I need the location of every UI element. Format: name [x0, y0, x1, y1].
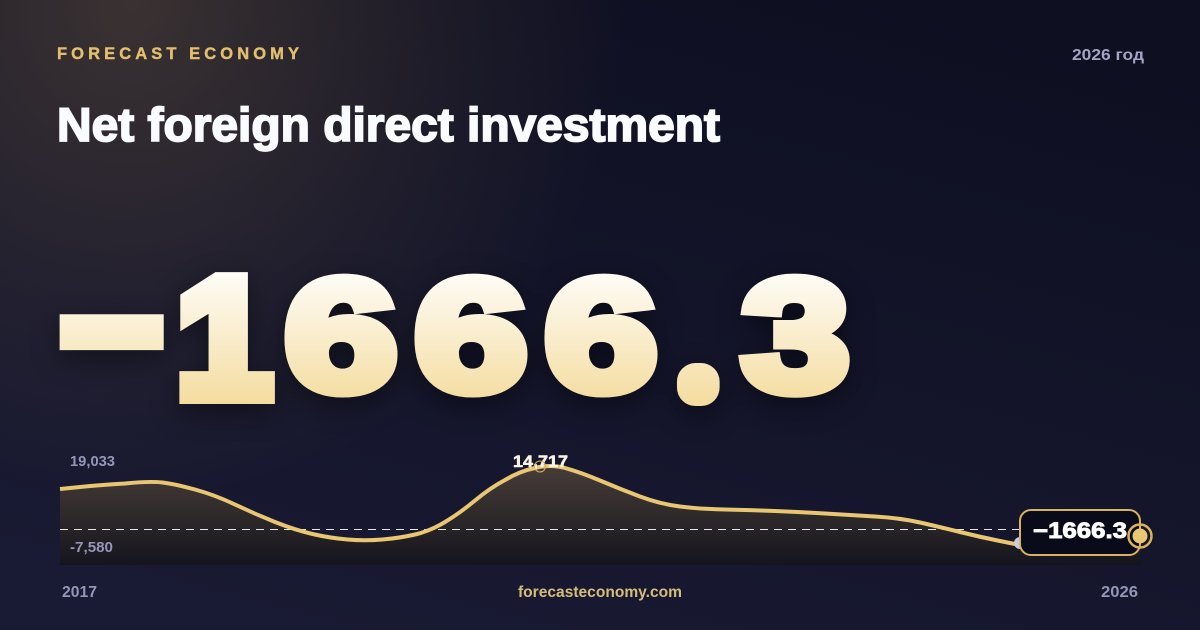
headline value: .	[693, 352, 704, 396]
end year: 2026	[1101, 584, 1138, 601]
peak label: 14,717	[513, 452, 568, 471]
current value callout	[1020, 510, 1140, 555]
end point dot	[1014, 537, 1026, 549]
current value callout: −1666.3	[1033, 518, 1127, 543]
headline value: −	[51, 145, 172, 512]
headline value: 6	[415, 248, 527, 424]
title: Net foreign direct investment	[57, 98, 720, 151]
website: forecasteconomy.com	[518, 584, 682, 601]
start year: 2017	[62, 584, 97, 601]
chart area fill	[60, 466, 1141, 565]
headline value: 3	[742, 248, 849, 424]
peak marker	[534, 461, 546, 472]
headline value: 1	[176, 244, 272, 433]
brand eyebrow: FORECAST ECONOMY	[57, 45, 299, 63]
max axis label: 19,033	[70, 453, 115, 470]
zero reference line	[60, 528, 1141, 530]
current value marker	[1128, 524, 1152, 548]
min axis label: -7,580	[70, 539, 113, 556]
chart line	[60, 466, 1020, 545]
chart	[60, 452, 1152, 565]
headline value	[51, 145, 849, 512]
year label: 2026 год	[1072, 47, 1144, 64]
headline value: 6	[285, 248, 397, 424]
headline value: 6	[545, 248, 657, 424]
